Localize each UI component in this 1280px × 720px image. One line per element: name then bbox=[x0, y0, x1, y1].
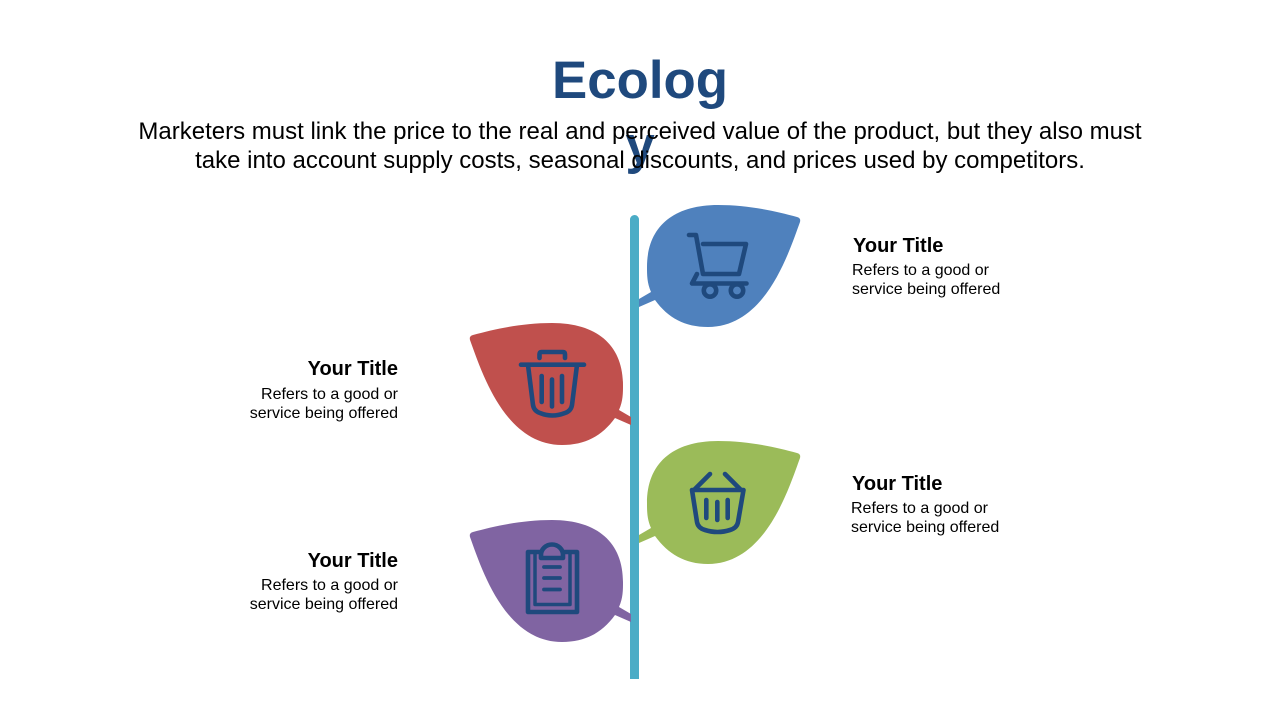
panel: green leaf with basket bbox=[639, 441, 800, 564]
subtitle text bbox=[138, 118, 1142, 174]
icon: shopping cart bbox=[689, 235, 746, 297]
subtitle text: Marketers must link the price to the real and perceived value of the product, but they also must bbox=[138, 118, 1142, 145]
text block: left upper: Your Title bbox=[308, 358, 398, 380]
icon: trash can bbox=[521, 352, 584, 416]
text block: left upper bbox=[250, 358, 399, 422]
panel: blue leaf with cart bbox=[639, 205, 800, 327]
text block: left lower: Your Title bbox=[308, 550, 398, 572]
text block: right lower bbox=[851, 473, 999, 536]
panel: purple leaf with clipboard bbox=[470, 520, 631, 642]
text block: right top: Refers to a good or bbox=[852, 262, 990, 279]
icon: shopping basket bbox=[692, 474, 744, 532]
text block: left lower: Refers to a good or bbox=[261, 577, 399, 594]
panel: red leaf with trash can bbox=[470, 323, 631, 445]
text block: right top: Your Title bbox=[853, 235, 943, 257]
text block: left upper: service being offered bbox=[250, 405, 398, 422]
subtitle text: take into account supply costs, seasonal discounts, and prices used by competitors. bbox=[195, 147, 1085, 174]
text block: left upper: Refers to a good or bbox=[261, 386, 399, 403]
text block: right top bbox=[852, 235, 1000, 298]
leaf: blue bbox=[639, 205, 800, 327]
title: y bbox=[625, 116, 655, 175]
trunk: vertical stem bbox=[630, 215, 639, 679]
title: Ecolog bbox=[552, 51, 728, 110]
text block: right lower: service being offered bbox=[851, 519, 999, 536]
text block: right top: service being offered bbox=[852, 281, 1000, 298]
leaf: green bbox=[639, 441, 800, 564]
icon: clipboard bbox=[528, 544, 577, 612]
text block: left lower: service being offered bbox=[250, 596, 398, 613]
text block: left lower bbox=[250, 550, 399, 613]
leaf: red bbox=[470, 323, 631, 445]
text block: right lower: Your Title bbox=[852, 473, 942, 495]
leaf: purple bbox=[470, 520, 631, 642]
text block: right lower: Refers to a good or bbox=[851, 500, 989, 517]
